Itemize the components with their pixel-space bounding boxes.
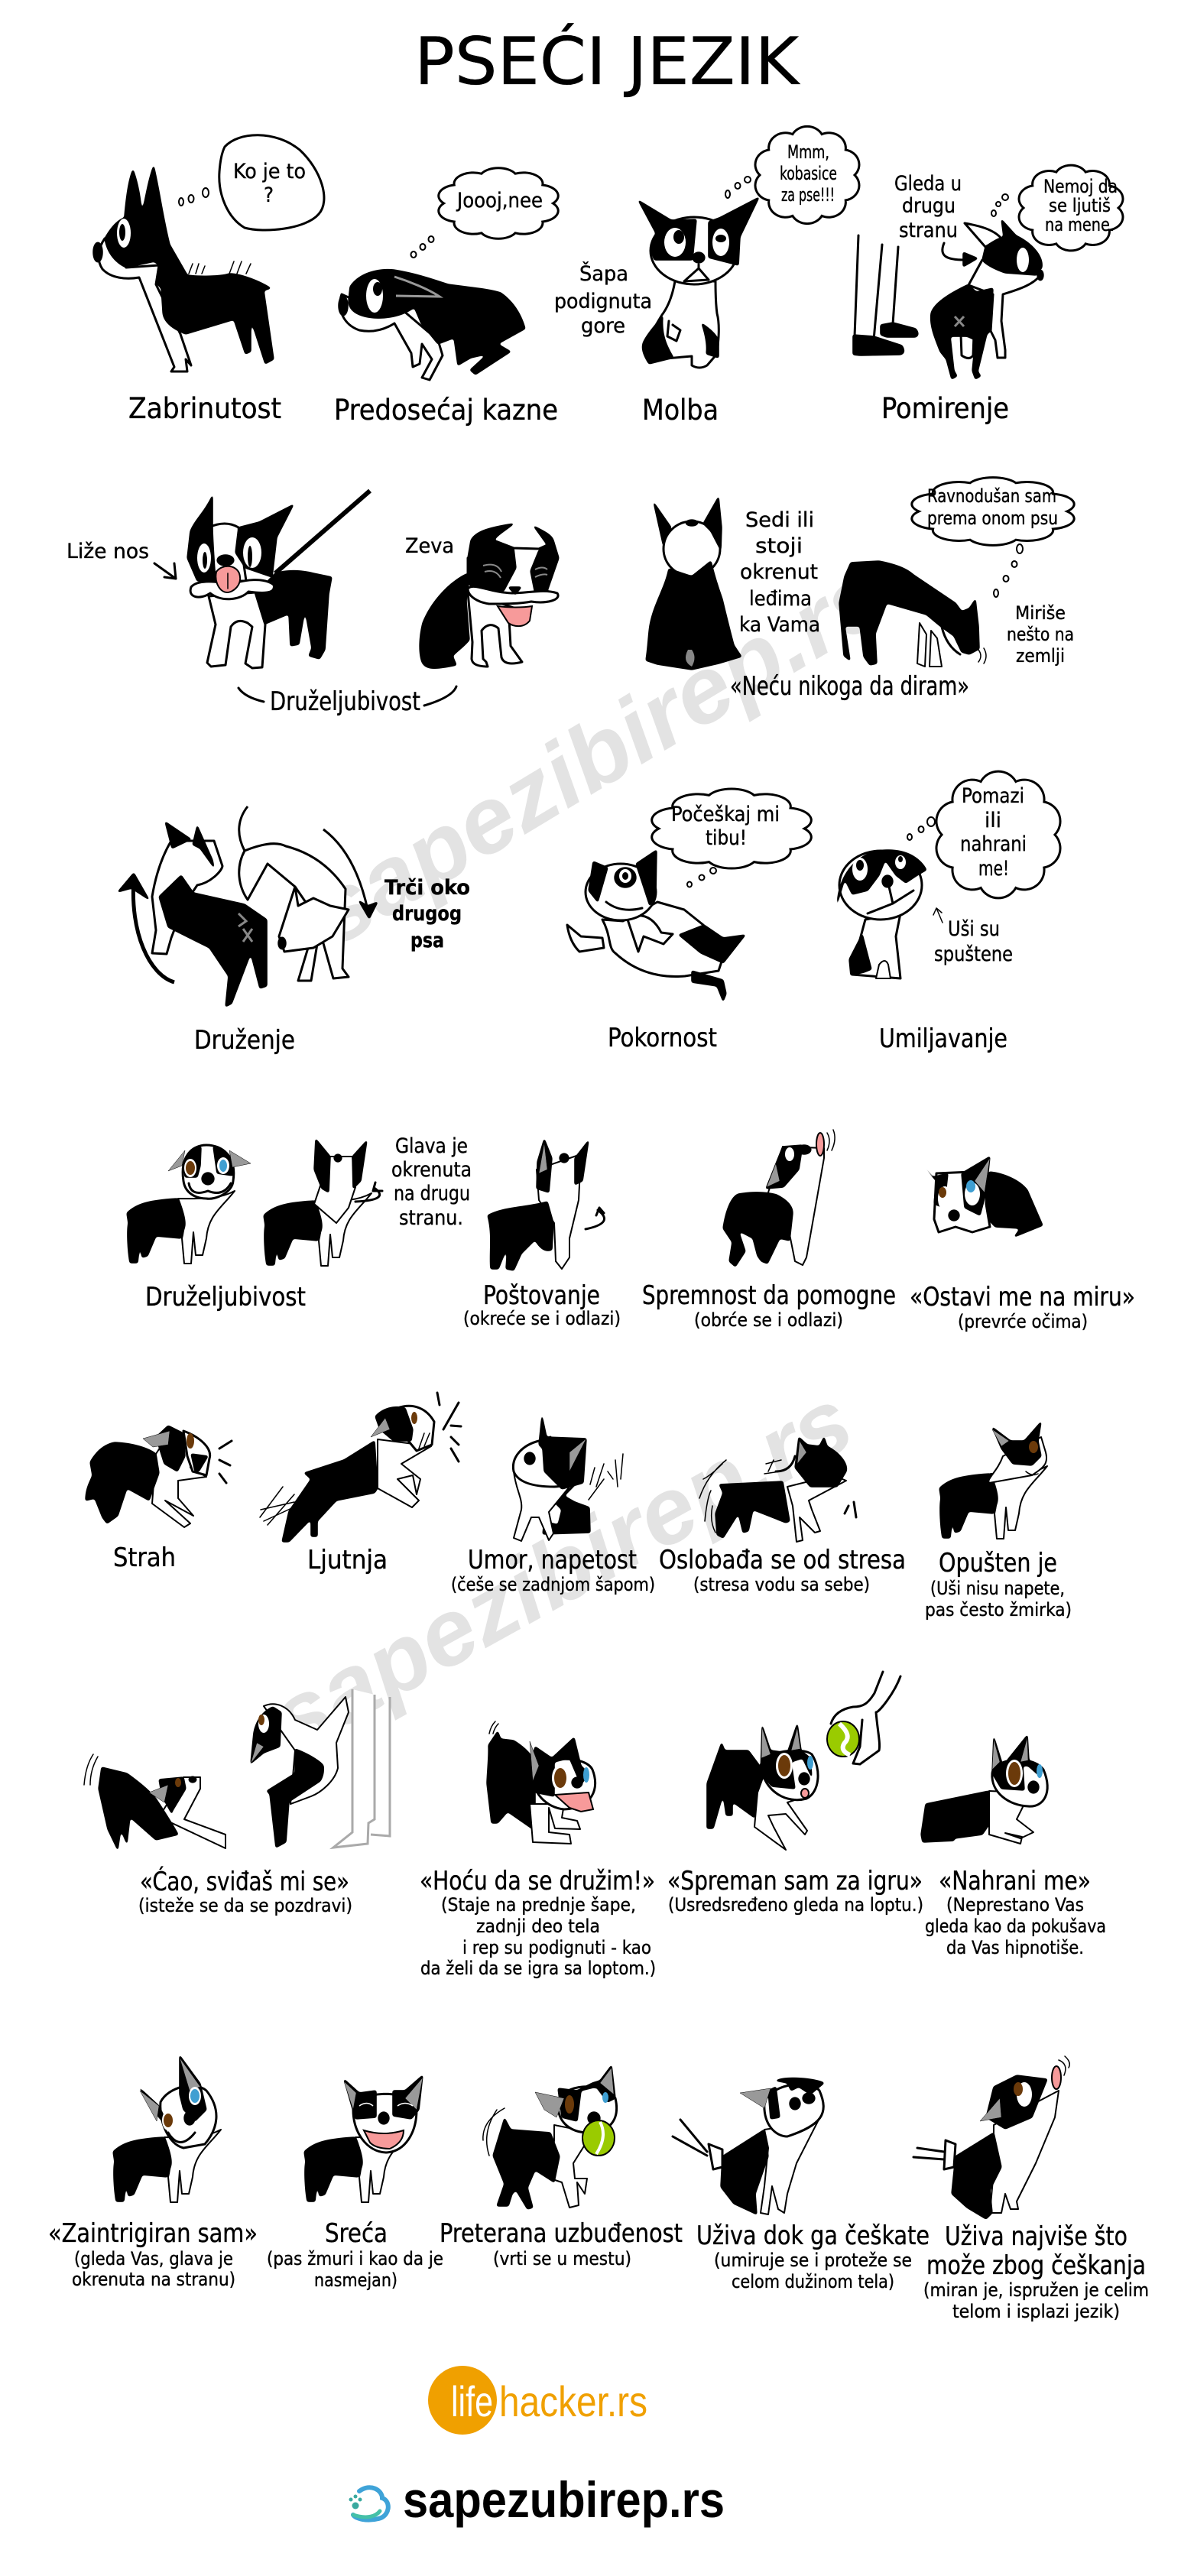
- thought cloud: Pomazi ili nahrani me: me!: [978, 857, 1009, 881]
- note: paw raised: [554, 261, 652, 338]
- caption: gleda kao da pokušava: [925, 1916, 1106, 1937]
- bracket: Druželjubivost: Druželjubivost: [270, 686, 420, 717]
- note: head turned to other side: na drugu: [394, 1182, 470, 1205]
- label: Pomirenje: [881, 392, 1009, 425]
- icon: relaxed dog: [939, 1422, 1047, 1539]
- thought cloud: Jooj, nee: Joooj,nee: [456, 189, 543, 213]
- thought cloud: Ravnodušan sam: prema onom psu: [927, 508, 1058, 529]
- panel: Opušten je: [925, 1422, 1072, 1621]
- note: head turned to other side: [391, 1134, 472, 1230]
- thought cloud: Nemoj da se ljutiš: na mene.: [1045, 214, 1115, 235]
- icon: yawning dog: [420, 524, 559, 668]
- panel: Spremnost da pomogne: [642, 1130, 896, 1331]
- note: head turned to other side: okrenuta: [391, 1158, 472, 1182]
- note: looks away: Gleda u: [894, 172, 962, 196]
- icon: begging dog: [638, 197, 759, 368]
- caption: (gleda Vas, glava je: [74, 2248, 233, 2269]
- icon: sitting dog staring: [921, 1735, 1047, 1844]
- icon: play bow dog with tongue out: [487, 1721, 595, 1844]
- caption: [925, 1894, 1106, 1958]
- thought cloud: Pomazi ili nahrani me: [907, 771, 1060, 898]
- icon: dog lying down rolling eyes: [923, 1157, 1043, 1237]
- caption: (isteže se da se pozdravi): [138, 1895, 352, 1916]
- icon: dog sitting with back turned: [646, 497, 741, 670]
- logo: lifehacker.rs: hacker.rs: [499, 2377, 647, 2425]
- icon: dog seen from behind: [264, 1139, 372, 1266]
- thought cloud: Počeškaj mi tibu: Počeškaj mi: [671, 803, 780, 826]
- wordmark: sapezubirep.rs: [403, 2471, 725, 2528]
- icon: worried dog: [93, 166, 274, 371]
- label: «Nahrani me»: [939, 1866, 1091, 1896]
- icon: dog sticking tongue out: [913, 2056, 1069, 2219]
- arrow: head turned: [355, 1183, 382, 1202]
- caption: (Usredsređeno gleda na loptu.): [668, 1894, 923, 1916]
- icon: person's legs: [853, 235, 918, 355]
- label: «Ostavi me na miru»: [910, 1282, 1135, 1312]
- note: paw raised: gore: [581, 314, 625, 338]
- caption: pas često žmirka): [925, 1599, 1072, 1621]
- caption: celom dužinom tela): [732, 2271, 894, 2292]
- panel: Zabrinutost: [93, 135, 324, 425]
- note: Trči oko drugog psa: psa: [410, 929, 444, 952]
- logo: lifehacker.rs: life: [451, 2377, 493, 2425]
- icon: dog scratching: [513, 1416, 623, 1541]
- panel: Ćao, sviđaš mi se: [84, 1689, 390, 1916]
- note: sits or stands with back turned: leđima: [749, 587, 812, 611]
- note: looks away: [894, 172, 962, 242]
- icon: intrigued dog: [113, 2055, 221, 2202]
- panel: Umiljavanje: [837, 771, 1060, 1054]
- label: Strah: [113, 1543, 176, 1573]
- thought cloud: Nemoj da se ljutiš: [991, 165, 1123, 251]
- note: looks away: stranu: [899, 219, 958, 242]
- panel: Poštovanje: [463, 1139, 621, 1329]
- note: looks away: drugu: [902, 194, 956, 218]
- label: «Hoću da se družim!»: [420, 1866, 655, 1896]
- thought cloud: Ravnodušan sam: Ravnodušan sam: [927, 485, 1056, 507]
- icon: crouching dog: [339, 270, 525, 380]
- panel: Zaintrigiran sam: [48, 2055, 258, 2290]
- logo: lifehacker.rs: [428, 2366, 647, 2435]
- label: Pokornost: [608, 1023, 717, 1053]
- label: Spremnost da pomogne: [642, 1280, 896, 1311]
- note: sits or stands with back turned: Sedi ili: [745, 508, 814, 532]
- icon: dog licking nose: [187, 491, 370, 668]
- icon: fawning dog: [837, 850, 926, 978]
- label: Poštovanje: [483, 1280, 600, 1311]
- label: Predosećaj kazne: [334, 394, 558, 427]
- thought cloud: kobasice: Mmm,: [787, 141, 829, 163]
- watermark: sapezibirep.rs lower: sapezibirep.rs: [254, 1367, 869, 1772]
- panel: Druženje: [118, 806, 470, 1056]
- caption: (stresa vodu sa sebe): [693, 1574, 870, 1595]
- arrow: turning away: [586, 1208, 605, 1229]
- panel: Pomirenje: [853, 165, 1123, 425]
- icon: dog turning away: [488, 1139, 589, 1270]
- caption: (miran je, ispružen je celim: [923, 2279, 1149, 2301]
- label: [926, 2221, 1146, 2281]
- thought cloud: Pomazi ili nahrani me: Pomazi: [962, 784, 1024, 808]
- caption: [72, 2248, 235, 2290]
- panel: Druželjubivost (licks nose, yawns): [67, 491, 559, 717]
- label: Zabrinutost: [128, 392, 281, 425]
- arrow: left circling arrow: [118, 873, 174, 982]
- note: paw raised: Šapa: [579, 261, 628, 286]
- arrow: right circling arrow: [323, 829, 378, 919]
- panel: Spreman sam za igru: [667, 1672, 923, 1916]
- thought cloud: Ravnodušan sam: [912, 478, 1074, 597]
- note: Liže nos: Liže nos: [67, 540, 149, 563]
- label: Ljutnja: [307, 1545, 388, 1575]
- panel: Pokornost: [567, 789, 811, 1053]
- panel: Oslobađa se od stresa: [659, 1437, 906, 1595]
- thought bubble: Ko je to?: ?: [264, 183, 274, 207]
- caption: (Staje na prednje šape,: [441, 1894, 636, 1916]
- note: sniffs the ground: [1007, 602, 1074, 667]
- panel: Preterana uzbuđenost: [440, 2065, 683, 2269]
- panel: Molba: [554, 126, 859, 427]
- panel: Uživa dok ga češkate: [673, 2078, 930, 2292]
- note: sits or stands with back turned: okrenut: [740, 560, 818, 584]
- panel: Ostavi me na miru: [910, 1157, 1135, 1332]
- icon: overexcited dog with ball: [483, 2065, 617, 2209]
- caption: nasmejan): [314, 2269, 397, 2291]
- note: sniffs the ground: Miriše: [1015, 602, 1066, 624]
- icon: frightened dog: [86, 1426, 232, 1527]
- note: Trči oko drugog psa: [384, 876, 470, 952]
- label: «Spreman sam za igru»: [667, 1866, 923, 1896]
- note: Zeva: Zeva: [405, 534, 454, 558]
- label: Druželjubivost: [145, 1282, 306, 1312]
- panel: Nahrani me: [921, 1735, 1106, 1958]
- icon: dog looking away: [931, 219, 1043, 379]
- panel: Neću nikoga da diram: [646, 478, 1074, 702]
- label: Molba: [642, 394, 719, 427]
- thought cloud: Jooj, nee: [411, 168, 558, 258]
- thought cloud: kobasice: kobasice: [780, 163, 837, 184]
- arrow: to nose: [154, 563, 176, 579]
- thought cloud: Pomazi ili nahrani me: nahrani: [960, 832, 1027, 856]
- note: sniffs the ground: zemlji: [1016, 645, 1065, 667]
- note: sits or stands with back turned: ka Vama: [739, 613, 820, 637]
- caption: (prevrće očima): [958, 1311, 1088, 1332]
- caption: [267, 2248, 443, 2291]
- icon: black and white dog: [152, 822, 267, 1007]
- label: Opušten je: [939, 1548, 1057, 1578]
- thought bubble: Ko je to?: Ko je to: [233, 160, 306, 183]
- icon: happy dog: [304, 2075, 423, 2202]
- panel: Uživa najviše: [913, 2056, 1149, 2322]
- note: Trči oko drugog psa: Trči oko: [384, 876, 470, 900]
- watermark: sapezibirep.rs upper: sapezibirep.rs: [293, 541, 904, 965]
- icon: dog ready to play: [707, 1724, 818, 1850]
- label: Preterana uzbuđenost: [440, 2218, 683, 2249]
- panel: Umor, napetost: [451, 1416, 655, 1595]
- icon: paw in cloud: [349, 2487, 388, 2520]
- caption: (okreće se i odlazi): [463, 1308, 621, 1329]
- caption: i rep su podignuti - kao: [462, 1937, 651, 1958]
- panel: Strah: [86, 1426, 232, 1573]
- label: Druženje: [194, 1025, 295, 1056]
- note: ears lowered: [934, 917, 1013, 966]
- panel: Hoću da se družim: [420, 1721, 656, 1979]
- caption: (Uši nisu napete,: [930, 1578, 1065, 1599]
- note: ears lowered: spuštene: [934, 942, 1013, 966]
- caption: [714, 2250, 912, 2292]
- icon: dog looking up: [723, 1130, 835, 1267]
- note: sits or stands with back turned: [739, 508, 820, 637]
- icon: angry dog: [260, 1393, 461, 1542]
- label: Umor, napetost: [468, 1545, 637, 1575]
- caption: (vrti se u mestu): [493, 2248, 631, 2269]
- icon: friendly dog facing viewer: [127, 1145, 251, 1264]
- thought cloud: kobasice: za pse!!!: [781, 184, 835, 206]
- panel: Druželjubivost (small): [127, 1134, 472, 1312]
- thought cloud: Pomazi ili nahrani me: ili: [985, 809, 1001, 832]
- label: «Zaintrigiran sam»: [48, 2218, 258, 2249]
- note: head turned to other side: Glava je: [395, 1134, 468, 1158]
- icon: dog lying on its back: [567, 850, 745, 1001]
- panel: Sreća: [267, 2075, 443, 2291]
- note: head turned to other side: stranu.: [399, 1206, 463, 1230]
- thought cloud: Počeškaj mi tibu: [652, 789, 811, 887]
- icon: white dog: [239, 806, 349, 981]
- icon: dog stretching to greet: [84, 1754, 225, 1850]
- panel: Predosećaj kazne: [334, 168, 558, 427]
- label: Umiljavanje: [879, 1024, 1007, 1054]
- arrow: to lowered ears: [933, 908, 943, 923]
- caption: da želi da se igra sa loptom.): [420, 1958, 656, 1979]
- icon: dog jumping at curtain: [251, 1689, 390, 1848]
- note: ears lowered: Uši su: [948, 917, 1000, 941]
- icon: dog enjoying scratch: [673, 2078, 824, 2214]
- caption: (umiruje se i proteže se: [714, 2250, 912, 2271]
- title: PSEĆI JEZIK: [414, 23, 801, 100]
- thought bubble: Ko je to?: [179, 135, 324, 230]
- caption: zadnji deo tela: [476, 1916, 600, 1937]
- label: «Ćao, sviđaš mi se»: [140, 1866, 349, 1897]
- caption: [420, 1894, 656, 1979]
- note: sniffs the ground: nešto na: [1007, 624, 1074, 645]
- thought cloud: Nemoj da se ljutiš: se ljutiš: [1049, 195, 1111, 216]
- label: Uživa dok ga češkate: [696, 2221, 930, 2251]
- note: paw raised: podignuta: [554, 290, 652, 313]
- label: može zbog češkanja: [926, 2250, 1146, 2281]
- label: Sreća: [325, 2218, 388, 2249]
- note: Trči oko drugog psa: drugog: [392, 902, 462, 926]
- caption: (Neprestano Vas: [946, 1894, 1084, 1916]
- caption: (češe se zadnjom šapom): [451, 1574, 655, 1595]
- panel: Ljutnja: [260, 1393, 461, 1575]
- icon: dog shaking off: [699, 1437, 856, 1542]
- caption: okrenuta na stranu): [72, 2269, 235, 2290]
- note: sits or stands with back turned: stoji: [755, 534, 803, 558]
- caption: [925, 1578, 1072, 1621]
- label: «Neću nikoga da diram»: [730, 671, 969, 702]
- logo: sapezubirep.rs: [349, 2471, 725, 2528]
- caption: telom i isplazi jezik): [952, 2301, 1120, 2322]
- arrow: pointing at dog: [943, 243, 978, 267]
- label: Oslobađa se od stresa: [659, 1545, 906, 1575]
- caption: [923, 2279, 1149, 2322]
- label: Uživa najviše što: [945, 2221, 1127, 2252]
- thought cloud: Počeškaj mi tibu: tibu!: [706, 826, 747, 850]
- caption: (pas žmuri i kao da je: [267, 2248, 443, 2269]
- icon: hand holding ball: [827, 1672, 900, 1764]
- icon: dog sniffing the ground: [839, 561, 986, 667]
- caption: (obrće se i odlazi): [694, 1309, 843, 1331]
- caption: da Vas hipnotiše.: [946, 1937, 1084, 1958]
- thought cloud: Nemoj da se ljutiš: Nemoj da: [1043, 176, 1118, 197]
- thought cloud: kobasice: [725, 126, 859, 224]
